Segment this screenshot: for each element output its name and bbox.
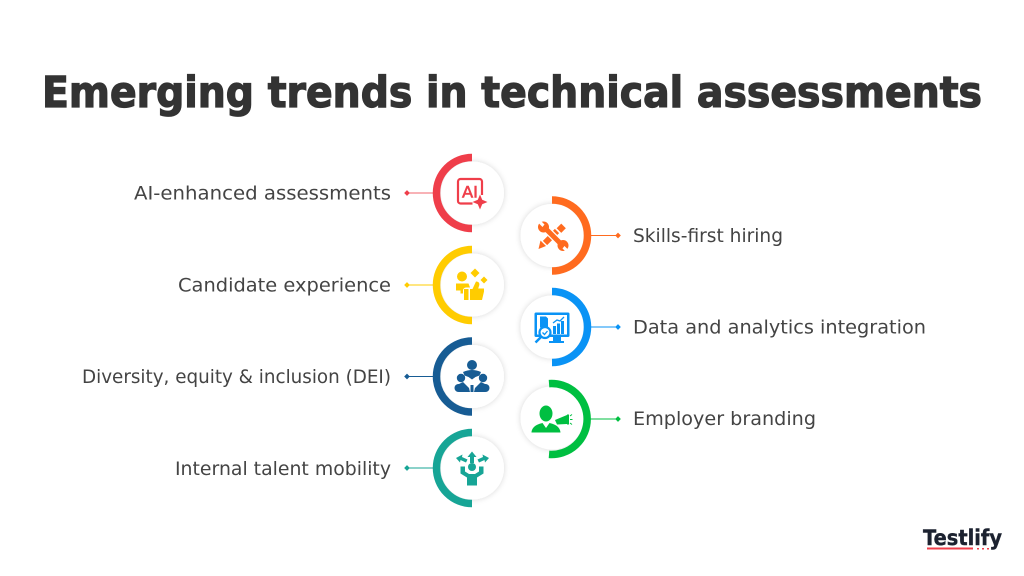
label: Candidate experience: Candidate experience [178,274,391,296]
arc [552,292,588,362]
icon circle [441,436,504,500]
icon circle [441,254,504,316]
label: Data and analytics integration: Data and analytics integration [633,316,926,338]
icon: three people in a circle [454,360,490,392]
logo underline [927,548,989,550]
icon: person with megaphone [532,406,572,432]
arc [436,432,472,504]
icon circle [441,345,504,408]
connector [404,465,434,471]
connector [404,374,434,379]
arc [436,250,472,320]
connector [404,282,434,288]
connector [404,190,434,196]
icon circle [520,386,584,450]
connector [590,416,621,422]
connector [590,233,621,238]
trend: Candidate experience [178,250,504,320]
logo: Testlify: Testlify [923,526,1002,550]
arc [436,341,472,412]
icon: analytics monitor [534,312,570,343]
trend: Data and analytics integration [520,292,926,362]
connector [590,324,621,330]
label: Employer branding: Employer branding [633,408,816,430]
label: Diversity, equity & inclusion (DEI): Diversity, equity & inclusion (DEI) [82,366,391,388]
icon circle [441,162,504,224]
trend: Employer branding [520,383,816,454]
arc [552,200,588,271]
icon circle [520,204,584,267]
trend: Diversity, equity & inclusion [82,341,504,412]
icon: AI sparkle [458,179,488,210]
label: Internal talent mobility: Internal talent mobility [175,458,391,480]
arc [549,383,587,454]
icon: wrench and pencil [538,221,568,252]
label: Skills-first hiring: Skills-first hiring [633,225,783,247]
icon: person with thumbs up [456,268,488,300]
arc [436,158,472,228]
icon: person with three arrows [456,452,489,486]
label: AI-enhanced assessments: AI-enhanced assessments [134,182,391,204]
trend: Internal talent mobility [175,432,504,504]
icon: AI sparkle: AI [462,182,478,202]
trend: Skills-first hiring [520,200,783,271]
trend: AI-enhanced assessments [134,158,504,228]
icon circle [520,296,584,358]
